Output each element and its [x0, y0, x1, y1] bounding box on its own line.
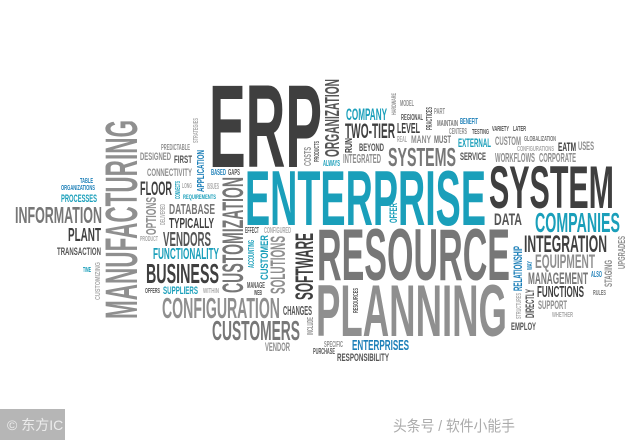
word cluster: lower right: DIRECTLY [523, 289, 537, 318]
word cluster: customization column: INCLUDE [306, 317, 315, 335]
word cluster: top right: LATER [513, 126, 526, 133]
word cluster: centre left: APPLICATION [196, 150, 207, 192]
word cluster: lower right: STRUCTURES [516, 293, 523, 319]
word cluster: top centre: ALWAYS [323, 159, 340, 168]
word cluster: customization column [217, 177, 319, 335]
word cluster: centre left: BUSINESS [146, 258, 219, 289]
watermark: photo credit badge [0, 409, 65, 440]
word cluster: left side: CUSTOMIZING [95, 262, 102, 300]
word cluster: customization column: CHANGES [283, 303, 312, 318]
word cluster: centre left: REQUIREMENTS [183, 195, 216, 201]
word cluster: top centre: HARDWARE [392, 93, 398, 115]
word cluster: centre left: BASED [211, 168, 226, 177]
word cluster: top centre: COMPANY [346, 105, 387, 124]
word cluster: top centre: REGIONAL [401, 113, 423, 122]
word cluster: top centre: MAINTAIN [437, 119, 458, 128]
word cluster: top right: CORPORATE [539, 150, 576, 165]
word cluster: centre left: CONNECTIVITY [147, 167, 192, 179]
word cluster: bottom centre: PURCHASE [313, 347, 335, 356]
word cluster: top centre: OFFER [388, 203, 400, 223]
text: USES [578, 139, 594, 153]
word cluster: centre left: FLOOR [140, 179, 172, 200]
word cluster: top right: VARIETY [492, 126, 509, 133]
word cluster: top centre: TWO-TIER [345, 120, 395, 143]
word cluster: centre left: WITHIN [203, 288, 219, 295]
word cluster: left side: TIME [83, 267, 91, 274]
word cluster: top right: WORKFLOWS [495, 150, 535, 165]
word cluster: lower right: WAY [527, 261, 534, 270]
watermark: author credit: 头条号 / 软件小能手 [393, 418, 515, 435]
word cluster: customization column: MANAGE [247, 281, 265, 290]
word cluster: centre left: SUPPLIERS [163, 285, 198, 297]
word cluster: bottom centre: RESPONSIBILITY [337, 352, 389, 364]
word cluster: top centre [303, 79, 491, 223]
word cluster: top centre: INTEGRATED [343, 151, 381, 166]
word cluster: lower right: RELATIONSHIP [511, 246, 525, 291]
word cluster: top centre: LEVEL [397, 120, 420, 137]
word cluster: centre left: LONG [182, 183, 192, 190]
word cluster: top centre: REAL [397, 135, 407, 144]
word cluster: centre left: PREDICTABLE [161, 143, 190, 152]
word cluster: top centre: SYSTEMS [388, 142, 456, 172]
word cluster: top centre: CENTERS [449, 127, 467, 136]
word cluster: lower right: SUPPORT [538, 298, 567, 312]
word cluster: centre left: OFFERS [145, 288, 160, 295]
word cloud: main large terms [96, 61, 620, 352]
word cluster: top centre: ORGANIZATION [322, 79, 344, 157]
word cluster: left side: ORGANIZATIONS [61, 185, 95, 192]
word cluster: centre left: TYPICALLY [169, 215, 214, 232]
word cluster: centre left: ISSUES [207, 182, 219, 191]
word cluster: top centre: MANY [411, 134, 431, 146]
word cluster: centre left: DATABASE [169, 201, 215, 218]
word cluster: top centre: COSTS [303, 147, 314, 166]
word cluster: customization column: CUSTOMER [259, 235, 271, 280]
word cluster: left side: INFORMATION [15, 202, 102, 228]
word cluster: bottom centre [313, 337, 409, 364]
word cluster: top centre: RUN [344, 138, 355, 153]
text: CUSTOMIZATION [217, 177, 250, 293]
word cluster: top centre: MODEL [400, 99, 414, 108]
word cluster: top right: EATM [558, 140, 576, 154]
text: CUSTOMERS [212, 315, 300, 346]
word cluster: top centre: MUST [434, 134, 451, 146]
word cluster: left side [15, 178, 102, 300]
word cluster: centre left: OPTIONS [143, 197, 160, 235]
word cluster: centre left: DELIVERED [160, 204, 167, 225]
word cloud: main large terms: ERP [209, 61, 322, 193]
word cluster: top right: GLOBALIZATION [524, 136, 556, 143]
word cluster: top centre: PART [434, 107, 445, 116]
word cluster: customization column: CONFIGURED [264, 226, 291, 235]
word cluster: centre left: FIRST [174, 154, 192, 166]
word cluster: left side: TABLE [80, 178, 93, 185]
word cluster: centre left: FUNCTIONALITY [153, 246, 219, 263]
word cluster: centre left: VENDORS [163, 229, 211, 251]
word cluster: left side: PROCESSES [61, 193, 97, 205]
word cluster: lower right [494, 210, 628, 333]
word cluster: top right: CUSTOM [495, 134, 521, 148]
word cluster: centre left: PRODUCT [140, 236, 158, 243]
word cluster: bottom centre: ENTERPRISES [352, 337, 409, 354]
word cluster: customization column: SOFTWARE [291, 233, 319, 300]
word cluster: centre left: CONNECTS [175, 181, 182, 199]
word cluster: centre left [140, 118, 300, 354]
word cluster: top centre: SERVICE [460, 151, 486, 163]
word cluster: centre left: STRATEGIES [193, 118, 200, 143]
word cluster: top centre: PRODUCTS [314, 141, 321, 162]
word cluster: lower right: ALSO [591, 270, 602, 279]
word cluster: top right: CONFIGURATIONS [517, 146, 554, 153]
word cluster: centre left: CONFIGURATION [162, 293, 280, 325]
word cluster: lower right: STAGING [603, 260, 615, 287]
word cluster: centre left: DESIGNED [140, 151, 171, 163]
word cluster: top right [492, 126, 594, 165]
word cluster: top centre: TESTING [472, 129, 489, 136]
word cluster: customization column: EFFECT [245, 226, 259, 235]
watermark: photo credit badge: © 东方IC [7, 417, 63, 433]
word cluster: lower right: WHETHER [552, 312, 573, 319]
word cluster: customization column: SOLUTIONS [267, 236, 290, 294]
word cluster: top centre: BEYOND [359, 142, 384, 154]
word cluster: bottom centre: SPECIFIC [324, 340, 343, 349]
word cluster: lower right: UPGRADES [617, 236, 628, 269]
word cluster: top centre: BENEFIT [460, 117, 478, 126]
word: RESOURCES: RESOURCES [353, 288, 360, 313]
word cluster: top centre: EXTERNAL [458, 136, 491, 150]
word cluster: customization column: WEB [254, 290, 262, 297]
word cluster: customization column: ACCOUNTING [247, 240, 256, 268]
word cluster: top centre: PRACTICES [425, 107, 434, 130]
word cluster: lower right: FUNCTIONS [537, 284, 584, 301]
word cluster: left side: TRANSACTION [57, 246, 101, 258]
word cluster: centre left: GAPS [228, 168, 240, 177]
word cluster: centre left: VENDOR [265, 340, 290, 354]
word cluster: lower right: RULES [593, 290, 606, 297]
word cluster: lower right: EMPLOY [511, 321, 536, 333]
word cluster: lower right: DATA [494, 210, 522, 229]
word cluster: left side: PLANT [68, 225, 101, 245]
